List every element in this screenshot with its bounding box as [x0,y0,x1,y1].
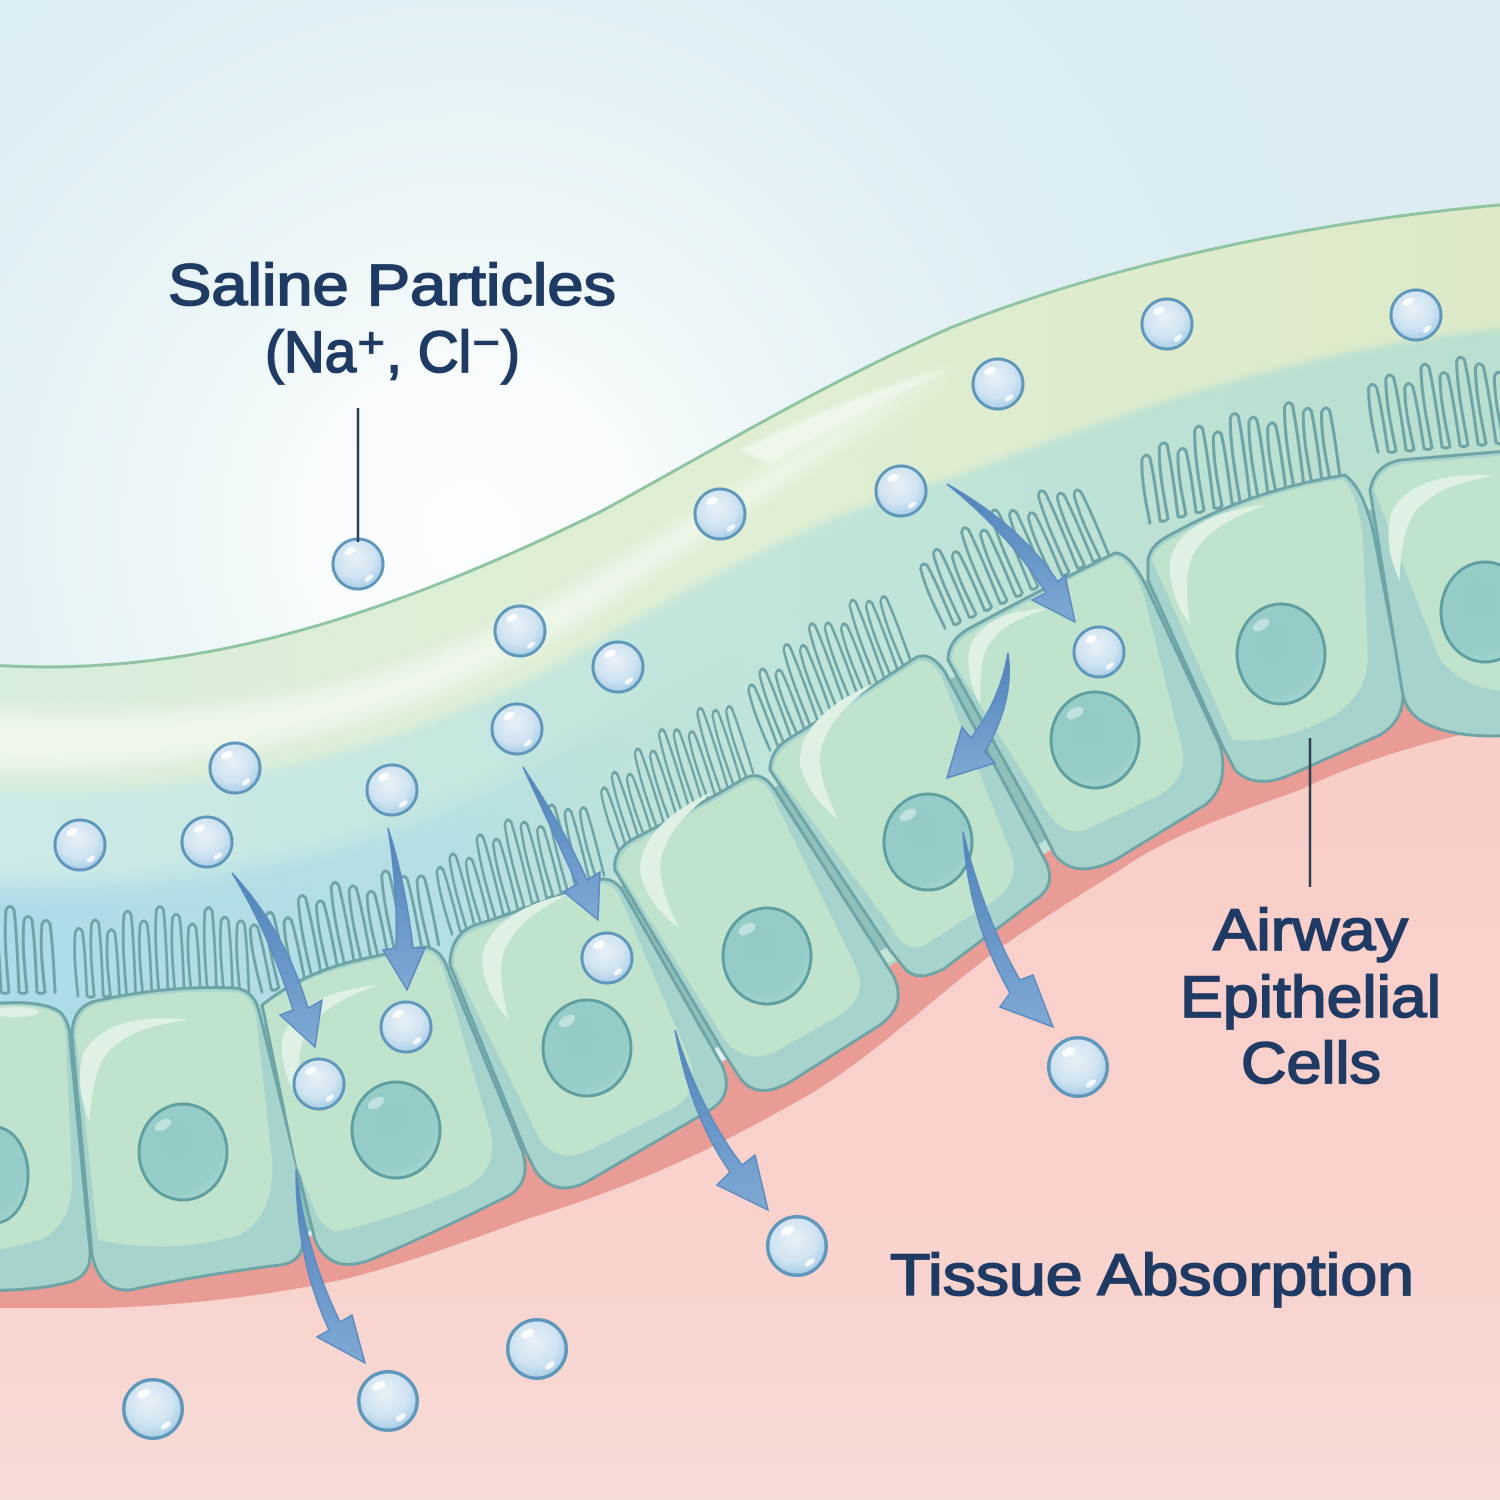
epithelial cell 1 [70,988,303,1290]
arrow: into cell 2 left [232,873,322,1047]
basement membrane strip [0,695,1500,1308]
cell underlay [72,470,1500,1250]
epithelial cell 2 [262,947,525,1264]
arrow: cell 3 to tissue [675,1030,768,1210]
cilia rows [0,349,1500,998]
epithelial cell 3 [450,879,726,1188]
arrow: cell 6 to cell 5 [947,653,1009,778]
label: saline particles [168,253,616,385]
epithelial cell 4 [615,776,898,1091]
epithelial cell 0 [0,1003,90,1290]
saline particles [55,290,1441,1438]
periciliary layer [0,326,1500,1200]
epithelial cell 8 [1370,450,1500,736]
arrow: into cell 2 right [383,828,425,990]
tissue layer [0,695,1500,1500]
label: airway epithelial cells [1180,898,1441,1096]
mucus layer [0,204,1500,1200]
label: airway epithelial cells: Cells [1241,1031,1381,1096]
label: tissue absorption: Tissue Absorption [890,1243,1414,1308]
arrow: cell 5 to tissue [963,832,1053,1027]
label: saline particles: Saline Particles [168,253,616,318]
epithelial cell 6 [948,553,1223,869]
leader line: saline particles [357,408,359,542]
arrow: into cell 3 [523,767,600,920]
epithelial cell 5 [770,656,1050,976]
arrow: into cell 6 [947,484,1075,622]
label: airway epithelial cells: Airway [1213,898,1408,963]
label: airway epithelial cells: Epithelial [1180,965,1441,1030]
leader line: airway epithelial cells [1309,738,1311,887]
arrow: cell 2 to tissue [296,1170,365,1363]
epithelial cell 7 [1148,475,1403,781]
label: saline particles: (Na⁺, Cl⁻) [265,320,520,385]
